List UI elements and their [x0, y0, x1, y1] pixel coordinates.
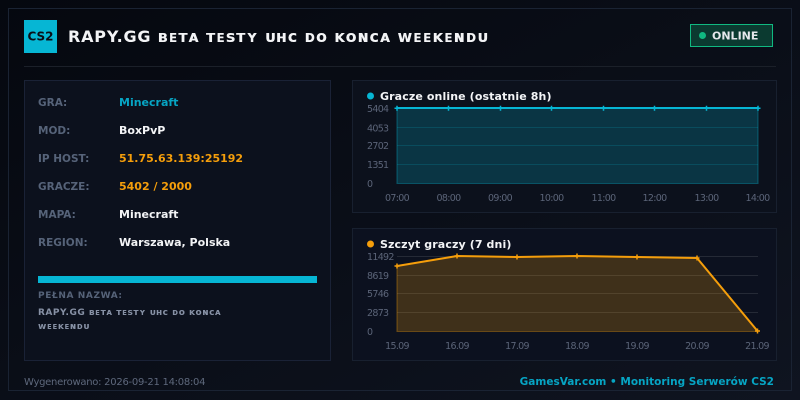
full name block: PEŁNA NAZWA: [38, 291, 123, 301]
x axis labels: 07:00 [385, 193, 410, 204]
footer: generated timestamp: Wygenerowano: 2026-09-21 14:08:04 [24, 377, 205, 388]
x axis labels [385, 193, 770, 204]
y axis labels [367, 104, 389, 190]
row: region: REGION: [38, 237, 88, 249]
x axis labels: 18.09 [565, 341, 590, 352]
y axis labels: 1351 [367, 160, 389, 171]
x axis labels: 21.09 [745, 341, 770, 352]
x axis labels: 10:00 [540, 193, 564, 204]
y axis labels: 0 [367, 179, 373, 190]
status badge: online [690, 24, 772, 46]
row: map: MAPA: [38, 209, 76, 221]
x axis labels: 12:00 [643, 193, 667, 204]
row: mod [38, 124, 165, 137]
full name block: ᴡᴇᴇᴋᴇɴᴅᴜ [38, 322, 90, 332]
row: region [38, 236, 230, 249]
y axis labels: 5404 [367, 104, 389, 115]
y axis labels: 5746 [367, 289, 389, 300]
y axis labels: 0 [367, 327, 373, 338]
area line chart [394, 254, 760, 334]
row: map [38, 208, 178, 221]
x axis labels: 20.09 [685, 341, 710, 352]
panel: peak players chart [352, 228, 776, 360]
row: players: 5402 / 2000 [119, 180, 192, 193]
row: ip host: IP HOST: [38, 153, 89, 165]
row: map: Minecraft [119, 208, 178, 221]
chart heading: Szczyt graczy (7 dni) [380, 238, 511, 251]
header: logo badge: CS2 [27, 30, 54, 44]
status badge: online: ONLINE [712, 30, 758, 42]
x axis labels: 15.09 [385, 341, 410, 352]
x axis labels: 08:00 [437, 193, 461, 204]
row: players: GRACZE: [38, 181, 90, 193]
x axis labels: 19.09 [625, 341, 650, 352]
row: players [38, 180, 192, 193]
footer: site credit: GamesVar.com • Monitoring Serwerów CS2 [520, 376, 774, 388]
x axis labels: 17.09 [505, 341, 530, 352]
row: ip host [38, 152, 243, 165]
y axis labels: 2702 [367, 141, 389, 152]
panel: players online chart [352, 80, 776, 212]
x axis labels: 16.09 [445, 341, 470, 352]
row: game: Minecraft [119, 96, 178, 109]
chart heading: Gracze online (ostatnie 8h) [380, 90, 552, 103]
capacity bar [38, 276, 317, 283]
row: mod: BoxPvP [119, 124, 165, 137]
x axis labels: 13:00 [695, 193, 719, 204]
full name block [38, 291, 221, 332]
row: game: GRA: [38, 97, 67, 109]
full name block: RAPY.GG ʙᴇᴛᴀ ᴛᴇsᴛʏ ᴜʜᴄ ᴅᴏ ᴋᴏɴᴄᴀ [38, 308, 221, 318]
x axis labels: 14:00 [746, 193, 770, 204]
y axis labels [367, 252, 394, 338]
y axis labels: 11492 [367, 252, 394, 263]
x axis labels: 09:00 [488, 193, 513, 204]
header: logo badge [24, 20, 57, 53]
row: game [38, 96, 178, 109]
y axis labels: 4053 [367, 124, 389, 134]
y axis labels: 8619 [367, 271, 389, 282]
row: ip host: 51.75.63.139:25192 [119, 152, 243, 165]
title: RAPY.GG ʙᴇᴛᴀ ᴛᴇsᴛʏ ᴜʜᴄ ᴅᴏ ᴋᴏɴᴄᴀ ᴡᴇᴇᴋᴇɴᴅᴜ [68, 27, 488, 46]
row: mod: MOD: [38, 125, 70, 137]
panel: server details [24, 80, 330, 360]
row: region: Warszawa, Polska [119, 236, 230, 249]
area line chart [394, 106, 760, 184]
y axis labels: 2873 [367, 308, 389, 319]
x axis labels [385, 341, 770, 352]
x axis labels: 11:00 [592, 193, 616, 204]
